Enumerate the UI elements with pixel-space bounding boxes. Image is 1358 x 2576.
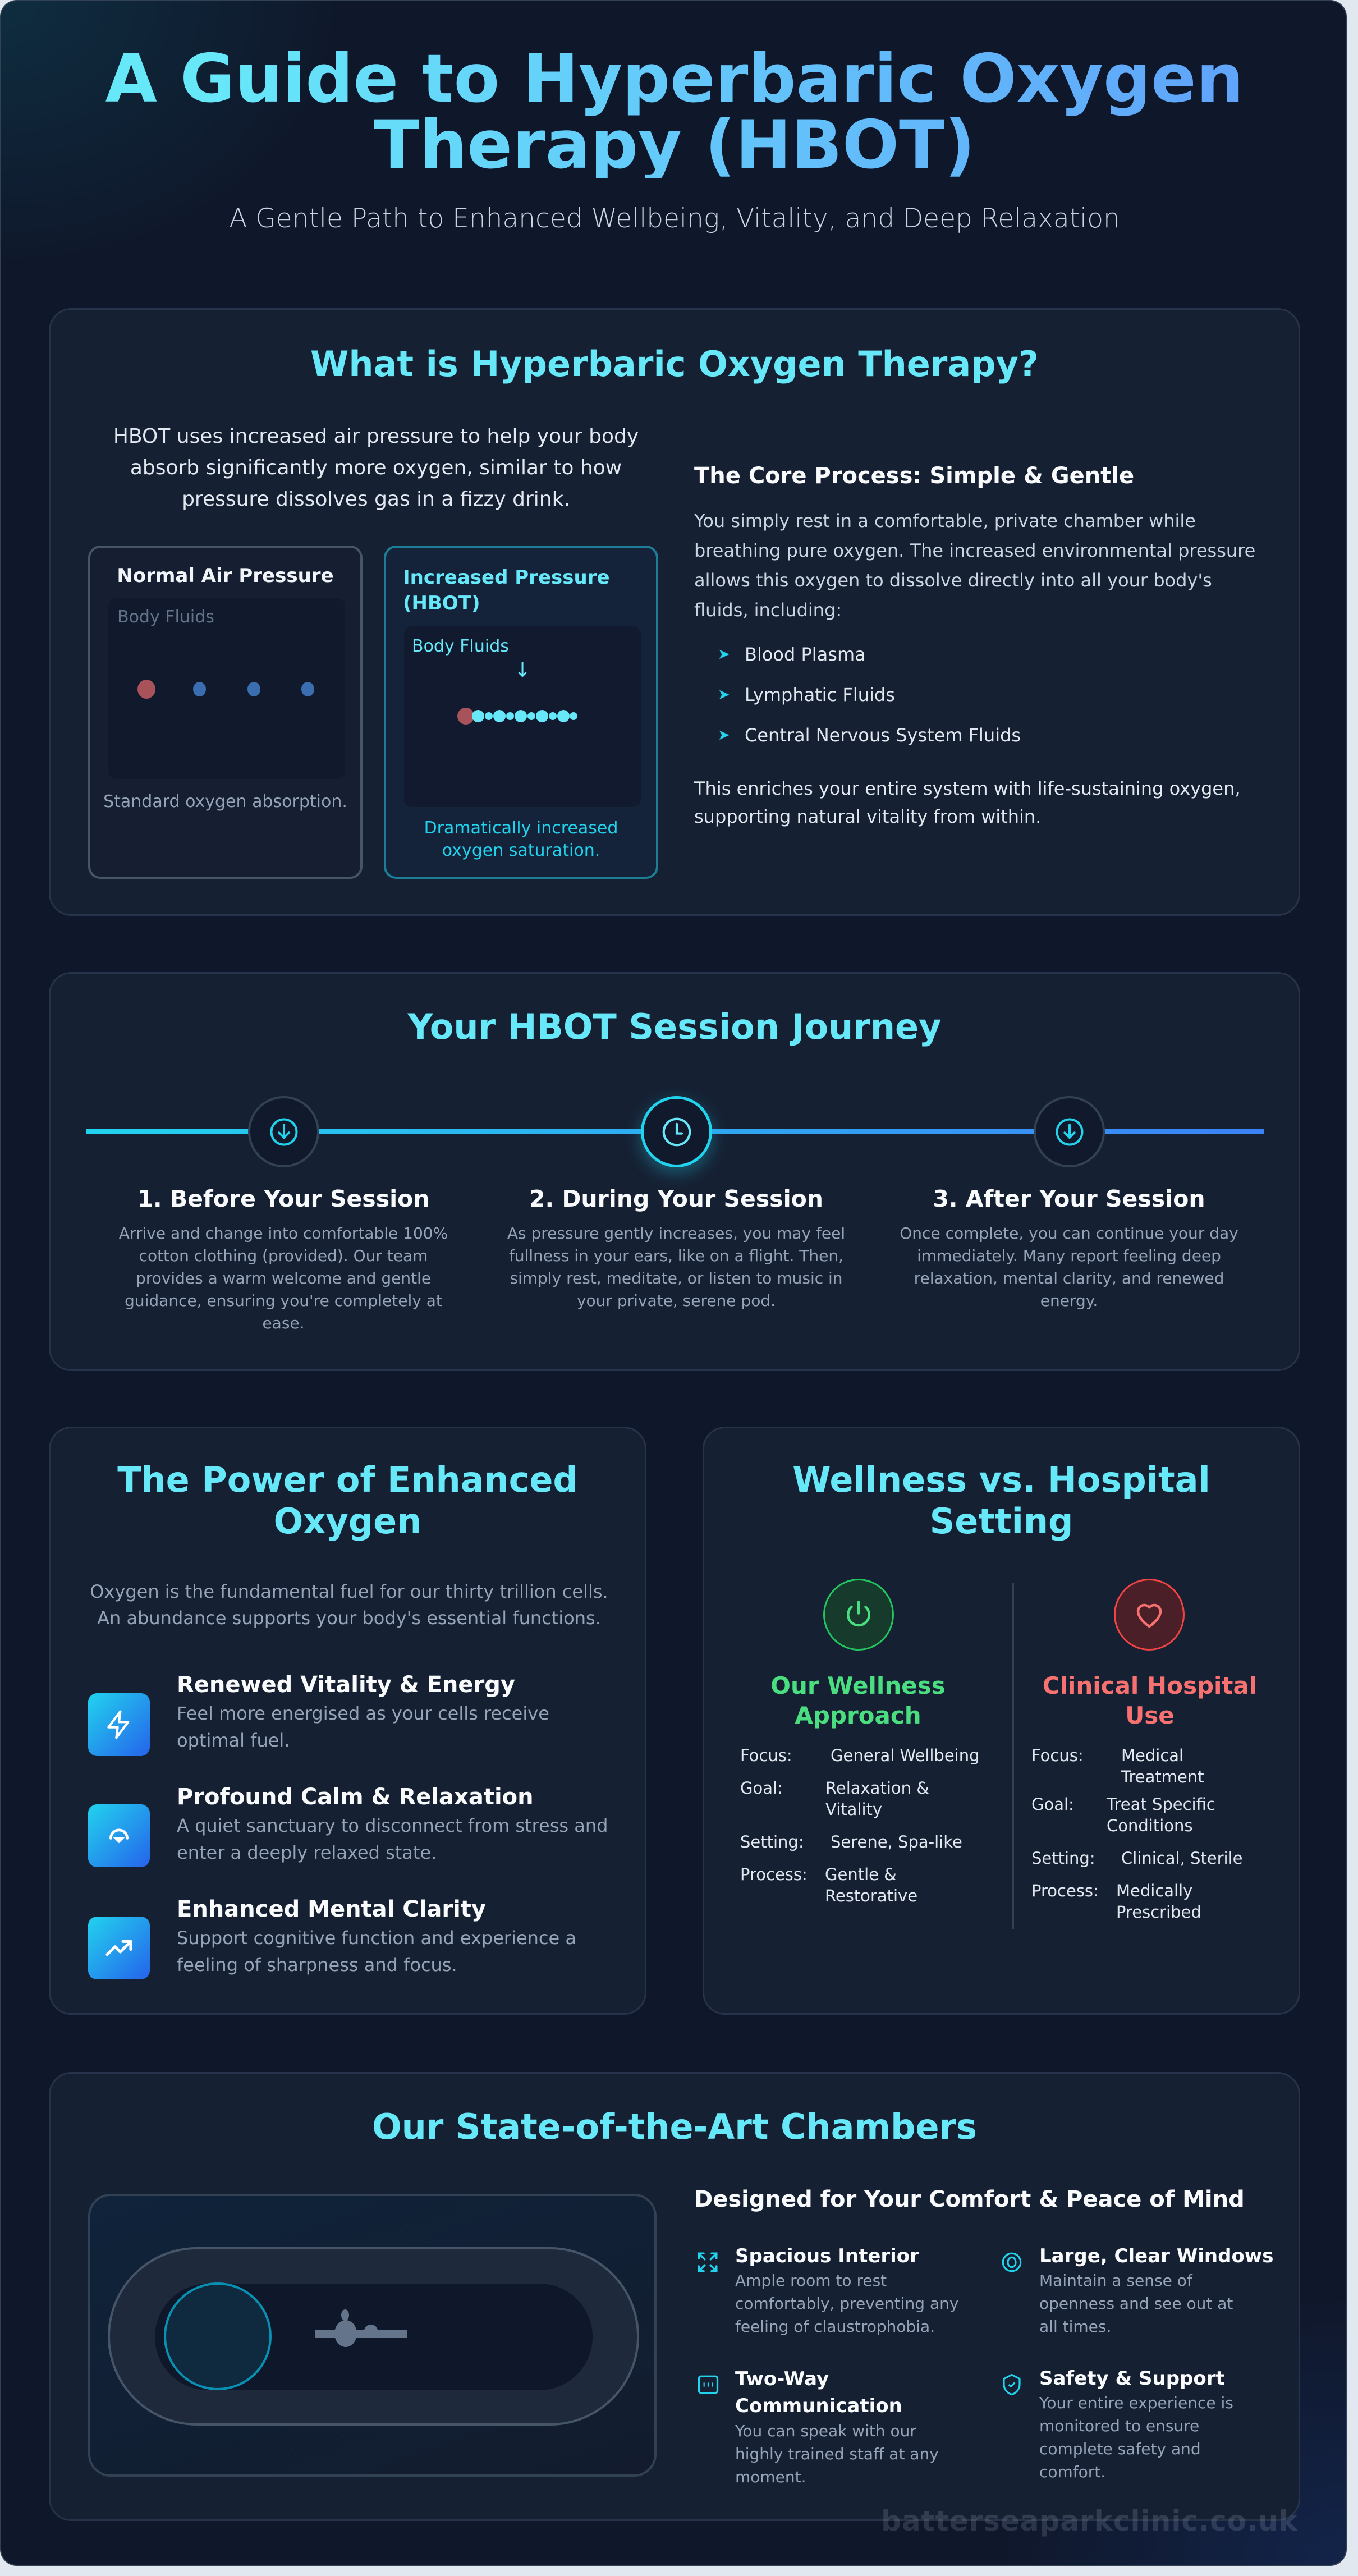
- heading: chambers: Our State-of-the-Art Chambers: [372, 2106, 977, 2147]
- column: hospital: Process:: [1031, 1881, 1099, 1900]
- panel: wellness vs hospital: [703, 1427, 1300, 2015]
- paragraph enrich: This enriches your entire system with life-sustaining oxygen, supporting natural vitality from within.: [694, 778, 1241, 827]
- column: hospital: Medically Prescribed: [1116, 1881, 1201, 1922]
- title: [1, 46, 1348, 178]
- column: hospital: Clinical, Sterile: [1121, 1849, 1243, 1868]
- caption increased: [424, 818, 618, 860]
- heading: wellness vs hospital: Wellness vs. Hospital: [792, 1459, 1210, 1500]
- benefit: calm: A quiet sanctuary to disconnect from stress and enter a deeply relaxed state.: [177, 1815, 608, 1863]
- heading: journey: Your HBOT Session Journey: [408, 1006, 941, 1047]
- step 3: Once complete, you can continue your day immediately. Many report feeling deep relaxation, mental clarity, and renewed energy.: [900, 1224, 1238, 1310]
- label: clinical hospital use: Use: [1125, 1702, 1175, 1729]
- feature: communication: You can speak with our highly trained staff at any moment.: [735, 2422, 939, 2486]
- column: wellness: Setting:: [740, 1832, 804, 1851]
- hospital details: [1031, 1746, 1243, 1922]
- bullet list: ➤: [718, 686, 730, 703]
- bullet list: Central Nervous System Fluids: [745, 725, 1021, 746]
- feature: safety: [1003, 2367, 1233, 2481]
- bullet list: ➤: [718, 646, 730, 663]
- heading: what is HBOT: What is Hyperbaric Oxygen Therapy?: [310, 343, 1039, 384]
- comparison: normal pressure: [88, 546, 363, 879]
- bullet list: Lymphatic Fluids: [745, 684, 895, 705]
- column: wellness: Goal:: [740, 1779, 783, 1798]
- label: our wellness approach: [770, 1672, 946, 1729]
- core process text: [694, 463, 1255, 827]
- icon: lightning: [88, 1693, 150, 1756]
- body fluids diagram normal: [108, 598, 345, 779]
- step 1: Arrive and change into comfortable 100% cotton clothing (provided). Our team provides a warm welcome and gentle guidance, ensuring you're completely at ease.: [119, 1224, 448, 1332]
- benefit: calm: Profound Calm & Relaxation: [177, 1784, 534, 1810]
- heading: power: The Power of Enhanced: [117, 1459, 578, 1500]
- intro oxygen: Oxygen is the fundamental fuel for our thirty trillion cells. An abundance supports your body's essential functions.: [90, 1581, 608, 1629]
- subtitle: A Gentle Path to Enhanced Wellbeing, Vitality, and Deep Relaxation: [229, 203, 1120, 234]
- benefit: clarity: Enhanced Mental Clarity: [177, 1896, 486, 1922]
- column: wellness: Gentle & Restorative: [825, 1865, 917, 1905]
- column: wellness: General Wellbeing: [831, 1746, 980, 1765]
- icon: intercom: [698, 2375, 718, 2394]
- icon: trend: [88, 1917, 150, 1979]
- wellness details: [740, 1746, 980, 1905]
- title: Therapy (HBOT): [374, 107, 975, 184]
- step 2: [507, 1185, 845, 1310]
- column: hospital: Setting:: [1031, 1849, 1095, 1868]
- chamber illustration: [88, 2194, 657, 2477]
- icon: heart: [1114, 1579, 1185, 1651]
- body fluids diagram increased: Body Fluids: [412, 636, 509, 656]
- label: increased pressure: Increased Pressure (HBOT): [403, 566, 610, 615]
- feature: spacious: Ample room to rest comfortably, preventing any feeling of claustrophobia.: [735, 2271, 958, 2336]
- subheading comfort: Designed for Your Comfort & Peace of Mind: [694, 2187, 1245, 2212]
- label: normal air pressure: Normal Air Pressure: [117, 565, 334, 587]
- icon: shield: [1003, 2374, 1021, 2395]
- feature: spacious: Spacious Interior: [735, 2245, 919, 2267]
- step 3: [900, 1185, 1238, 1310]
- feature: spacious: [698, 2245, 958, 2336]
- benefit: calm: [88, 1784, 608, 1867]
- benefit: vitality: Renewed Vitality & Energy: [177, 1672, 515, 1698]
- icon: step 3: [1034, 1096, 1105, 1167]
- panel: what is HBOT: [49, 308, 1300, 916]
- column: hospital: Goal:: [1031, 1795, 1074, 1814]
- caption increased: Dramatically increased: [424, 818, 618, 838]
- column: hospital: [1031, 1579, 1257, 1922]
- feature: windows: Maintain a sense of openness and see out at all times.: [1039, 2271, 1233, 2336]
- column: wellness: Process:: [740, 1865, 808, 1884]
- label: clinical hospital use: Clinical Hospital: [1043, 1672, 1257, 1699]
- label: our wellness approach: Our Wellness: [770, 1672, 946, 1699]
- heading: power: [117, 1459, 578, 1542]
- icon: calm: [88, 1804, 150, 1867]
- benefit: clarity: [88, 1896, 576, 1979]
- panel: chambers: [49, 2072, 1300, 2521]
- bullet list: [718, 644, 1021, 746]
- icon: step 1: [248, 1096, 319, 1167]
- panel: session journey: [49, 972, 1300, 1371]
- icon: power: [823, 1579, 894, 1651]
- feature: windows: Large, Clear Windows: [1039, 2245, 1273, 2267]
- benefit: vitality: Feel more energised as your cells receive optimal fuel.: [177, 1703, 549, 1751]
- body fluids diagram increased: ↓: [514, 659, 531, 682]
- column: wellness: Focus:: [740, 1746, 792, 1765]
- column: hospital: Treat Specific Conditions: [1107, 1795, 1215, 1835]
- benefit: clarity: Support cognitive function and experience a feeling of sharpness and focus.: [177, 1927, 576, 1975]
- body fluids diagram normal: Body Fluids: [117, 607, 214, 627]
- step 2: As pressure gently increases, you may feel fullness in your ears, like on a flight. Then, simply rest, meditate, or listen to music in your private, serene pod.: [507, 1224, 845, 1310]
- bullet list: ➤: [718, 727, 730, 744]
- label: our wellness approach: Approach: [795, 1702, 921, 1729]
- step 2: 2. During Your Session: [529, 1185, 823, 1212]
- divider: [1012, 1583, 1014, 1929]
- step 1: 1. Before Your Session: [137, 1185, 430, 1212]
- feature: safety: Safety & Support: [1039, 2367, 1225, 2390]
- subheading core process: The Core Process: Simple & Gentle: [694, 463, 1134, 489]
- paragraph core: You simply rest in a comfortable, private chamber while breathing pure oxygen. The increased environmental pressure allows this oxygen to dissolve directly into all your body's fluids, including:: [694, 510, 1255, 621]
- column: wellness: Relaxation & Vitality: [825, 1779, 929, 1819]
- panel: power of oxygen: [49, 1427, 646, 2015]
- label: clinical hospital use: [1043, 1672, 1257, 1729]
- title: A Guide to Hyperbaric Oxygen: [105, 40, 1244, 118]
- caption increased: oxygen saturation.: [442, 841, 600, 860]
- icon: expand: [698, 2252, 718, 2272]
- feature: communication: [698, 2368, 939, 2486]
- column: wellness: [740, 1579, 980, 1905]
- heading: wellness vs hospital: Setting: [930, 1501, 1073, 1542]
- feature: safety: Your entire experience is monitored to ensure complete safety and comfort.: [1039, 2394, 1233, 2481]
- feature: communication: Two-Way Communication: [735, 2368, 902, 2417]
- column: hospital: Focus:: [1031, 1746, 1084, 1765]
- column: hospital: Medical Treatment: [1121, 1746, 1204, 1786]
- timeline line: [86, 1129, 1264, 1134]
- bullet list: Blood Plasma: [745, 644, 866, 665]
- icon: window: [1002, 2253, 1021, 2272]
- benefit: vitality: [88, 1672, 549, 1756]
- comparison: increased pressure: [384, 546, 658, 879]
- intro text: HBOT uses increased air pressure to help your body absorb significantly more oxygen, similar to how pressure dissolves gas in a fizzy drink.: [113, 425, 639, 511]
- heading: power: Oxygen: [274, 1501, 421, 1542]
- caption normal: Standard oxygen absorption.: [103, 792, 347, 812]
- heading: wellness vs hospital: [792, 1459, 1210, 1542]
- watermark: batterseaparkclinic.co.uk: [881, 2505, 1298, 2537]
- column: wellness: Serene, Spa-like: [831, 1832, 962, 1851]
- step 3: 3. After Your Session: [933, 1185, 1205, 1212]
- icon: step 2: [641, 1096, 712, 1167]
- body fluids diagram increased: [404, 626, 641, 807]
- feature: windows: [1002, 2245, 1273, 2336]
